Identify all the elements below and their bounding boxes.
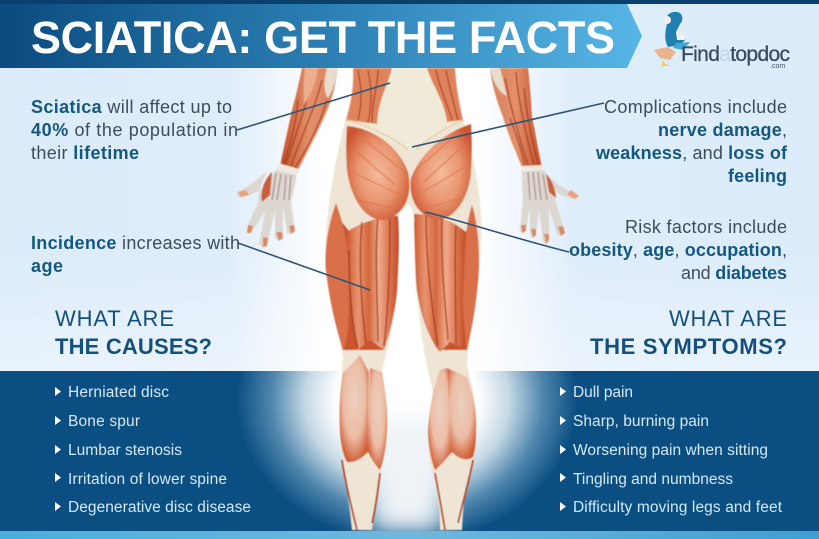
list: causes bbox=[55, 384, 251, 516]
right hand bbox=[520, 165, 579, 244]
text block: risk factors: obesity, age, occupation, bbox=[569, 240, 787, 260]
right hamstrings bbox=[414, 214, 466, 352]
text block: risk factors: and diabetes bbox=[681, 263, 787, 283]
heading: what are the symptoms bbox=[590, 306, 787, 359]
right thigh base bbox=[414, 215, 479, 350]
icon: duck mascot bbox=[654, 12, 690, 66]
heading: what are the symptoms: THE SYMPTOMS? bbox=[590, 334, 787, 359]
right outer thigh muscle bbox=[463, 205, 479, 348]
lower dark band bbox=[0, 371, 819, 531]
left calf bbox=[339, 355, 369, 462]
torso bbox=[345, 68, 473, 170]
title banner bbox=[0, 0, 819, 68]
right calf bbox=[428, 368, 452, 470]
heading: what are the causes: THE CAUSES? bbox=[55, 334, 212, 359]
text block: complications bbox=[595, 97, 788, 186]
logo wordmark: Findatopdoc bbox=[681, 43, 790, 66]
text block: incidence bbox=[31, 233, 240, 276]
text block: incidence: age bbox=[31, 256, 63, 276]
pointer lines bbox=[237, 83, 604, 290]
text block: complications: Complications include bbox=[604, 97, 787, 117]
left hand bbox=[237, 163, 299, 248]
text block: incidence: Incidence increases with bbox=[31, 233, 240, 253]
logo .com: .com bbox=[770, 63, 785, 70]
text block: risk factors bbox=[569, 217, 787, 283]
left arm bbox=[280, 68, 338, 170]
left leg bbox=[325, 122, 410, 530]
text block: complications: weakness, and loss of bbox=[595, 143, 788, 163]
list: symptoms: Difficulty moving legs and feet bbox=[573, 499, 783, 516]
text block: sciatica prevalence: 40% of the population in bbox=[31, 120, 238, 140]
gluteal muscles bbox=[345, 120, 472, 220]
list: causes: Irritation of lower spine bbox=[68, 471, 227, 488]
text block: sciatica prevalence: Sciatica will affect up to bbox=[31, 97, 232, 117]
title: SCIATICA: GET THE FACTS bbox=[31, 12, 615, 63]
heading: what are the symptoms: WHAT ARE bbox=[669, 306, 787, 331]
list: symptoms bbox=[560, 384, 783, 516]
list: causes: Herniated disc bbox=[68, 384, 169, 401]
list: symptoms: Sharp, burning pain bbox=[573, 413, 709, 430]
right arm bbox=[490, 68, 542, 167]
bottom strip bbox=[0, 531, 819, 539]
anatomy figure bbox=[237, 68, 579, 530]
text block: risk factors: Risk factors include bbox=[625, 217, 787, 237]
right leg bbox=[408, 122, 481, 530]
list: symptoms: Worsening pain when sitting bbox=[573, 442, 768, 459]
text block: sciatica prevalence: their lifetime bbox=[31, 143, 139, 163]
heading: what are the causes: WHAT ARE bbox=[55, 306, 174, 331]
left outer thigh muscle bbox=[325, 203, 349, 350]
list: causes: Bone spur bbox=[68, 413, 140, 430]
list: symptoms: Dull pain bbox=[573, 384, 633, 401]
logo: Findatopdoc bbox=[654, 12, 790, 70]
text block: complications: feeling bbox=[728, 166, 787, 186]
text block: complications: nerve damage, bbox=[658, 120, 787, 140]
list: symptoms: Tingling and numbness bbox=[573, 471, 733, 488]
left thigh base bbox=[325, 215, 398, 350]
heading: what are the causes bbox=[55, 306, 212, 359]
text block: sciatica prevalence bbox=[31, 97, 238, 163]
left hamstrings bbox=[347, 216, 399, 350]
list: causes: Lumbar stenosis bbox=[68, 442, 182, 459]
background bbox=[0, 0, 819, 372]
list: causes: Degenerative disc disease bbox=[68, 499, 251, 516]
